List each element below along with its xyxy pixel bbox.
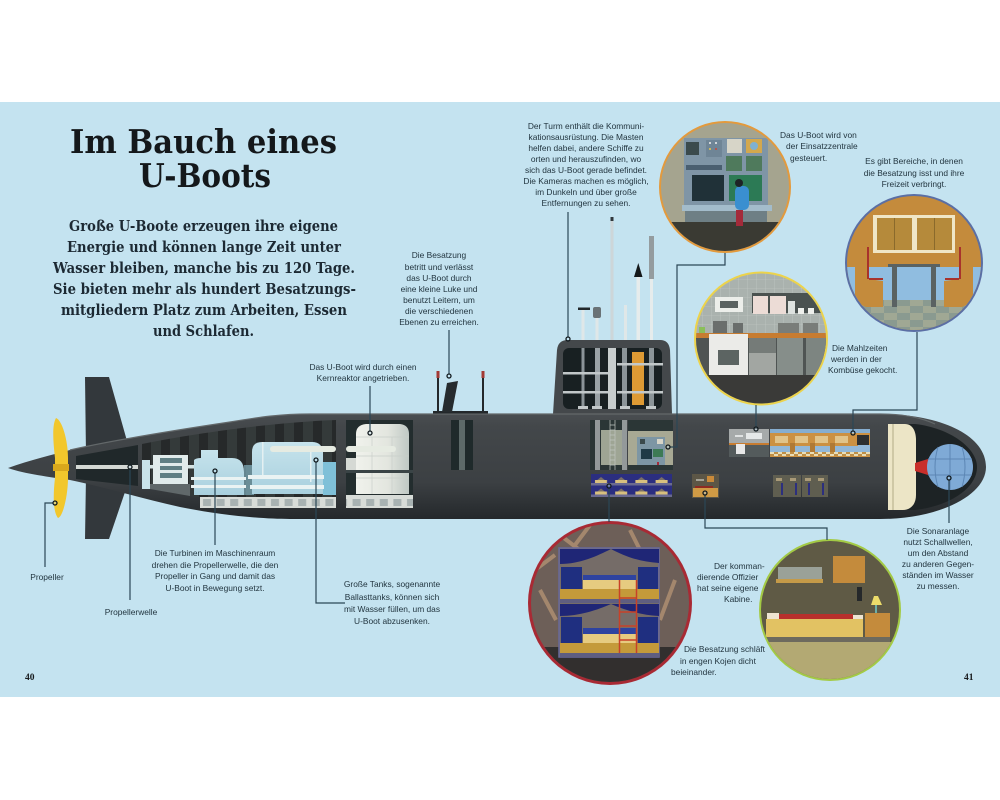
callout: hatch: eine kleine Luke und xyxy=(401,284,478,294)
ladder room xyxy=(590,420,627,470)
circle: bunks xyxy=(528,521,692,687)
hull top highlight xyxy=(70,414,935,450)
callout: ballast tanks: Große Tanks, sogenannte xyxy=(344,579,440,589)
callout: mess xyxy=(851,156,965,435)
callout: tower: sich das U-Boot gerade befindet. xyxy=(525,165,647,175)
callout: turbines: drehen die Propellerwelle, die den xyxy=(152,560,279,570)
callout: control room xyxy=(666,130,858,449)
page number right: 41 xyxy=(964,673,974,683)
callout: bunks: beieinander. xyxy=(671,667,717,677)
reactor room xyxy=(346,420,413,508)
hatch and snorkels xyxy=(433,371,488,414)
conning tower interior xyxy=(563,348,663,409)
intro text block: mitgliedern Platz zum Arbeiten, Essen xyxy=(61,302,347,319)
callout: propeller xyxy=(30,501,64,582)
page background panel xyxy=(0,102,1000,697)
callout: sonar: um den Abstand xyxy=(908,548,969,558)
title xyxy=(70,122,337,195)
hull xyxy=(8,414,986,519)
galley miniature xyxy=(729,429,769,457)
ladder shaft xyxy=(451,420,473,470)
submarine xyxy=(8,217,986,539)
callout: propeller: Propeller xyxy=(30,572,64,582)
callout: sonar: zu messen. xyxy=(917,581,959,591)
masts xyxy=(578,217,654,341)
bow sonar compartment xyxy=(888,424,977,510)
callout: tower xyxy=(523,121,649,341)
callout: bunks xyxy=(607,484,766,677)
callout: tower: helfen dabei, andere Schiffe zu xyxy=(528,143,644,153)
callout: officer cabin xyxy=(697,491,827,604)
circle: control room xyxy=(659,121,791,257)
callout: control room: Das U-Boot wird von xyxy=(780,130,857,140)
callout: ballast tanks: U-Boot abzusenken. xyxy=(354,616,430,626)
tail fins xyxy=(85,377,127,539)
propeller xyxy=(53,418,69,518)
callout: sonar: Die Sonaranlage xyxy=(907,526,970,536)
callout: officer cabin: hat seine eigene xyxy=(697,583,759,593)
callout: hatch: benutzt Leitern, um xyxy=(403,295,475,305)
callout: hatch: betritt und verlässt xyxy=(405,262,474,272)
callout: propeller shaft: Propellerwelle xyxy=(105,607,158,617)
callout: officer cabin: dierende Offizier xyxy=(697,572,759,582)
callout: ballast tanks: mit Wasser füllen, um das xyxy=(344,604,440,614)
conning tower xyxy=(553,340,672,414)
callout: sonar: zu anderen Gegen- xyxy=(902,559,974,569)
callout: officer cabin: Kabine. xyxy=(724,594,752,604)
callout: galley xyxy=(754,343,897,431)
callout: hatch: Ebenen zu erreichen. xyxy=(399,317,479,327)
callout: ballast tanks: Ballasttanks, können sich xyxy=(345,592,440,602)
callout: bunks: Die Besatzung schläft xyxy=(684,644,766,654)
callout: control room: der Einsatzzentrale xyxy=(786,141,858,151)
callout: turbines: Propeller in Gang und damit das xyxy=(155,571,275,581)
officer cabin miniature xyxy=(692,474,719,498)
callout: sonar xyxy=(902,476,974,591)
callout: propeller shaft xyxy=(105,465,158,617)
callout: tower: orten und herauszufinden, wo xyxy=(531,154,642,164)
callout: tower: Die Kameras machen es möglich, xyxy=(523,176,649,186)
title: Im Bauch eines xyxy=(70,122,337,161)
aft shaft compartment xyxy=(76,445,138,486)
intro text block xyxy=(52,218,356,340)
callout: galley: Kombüse gekocht. xyxy=(828,365,897,375)
callout: sonar: ständen im Wasser xyxy=(902,570,974,580)
callout: mess: die Besatzung isst und ihre xyxy=(864,168,965,178)
callout: galley: Die Mahlzeiten xyxy=(832,343,888,353)
circle: mess xyxy=(845,194,983,336)
bunks miniature xyxy=(591,474,672,497)
callout: tower: im Dunkeln und über große xyxy=(535,187,637,197)
callout: reactor: Kernreaktor angetrieben. xyxy=(317,373,409,383)
callout: galley: werden in der xyxy=(830,354,882,364)
intro text block: Wasser bleiben, manche bis zu 120 Tage. xyxy=(52,260,355,277)
callout: mess: Freizeit verbringt. xyxy=(882,179,946,189)
callout: bunks: in engen Kojen dicht xyxy=(680,656,757,666)
callout: reactor xyxy=(309,362,417,435)
crew cabins miniature xyxy=(773,475,828,497)
callout: tower: kationsausrüstung. Die Masten xyxy=(528,132,644,142)
callout: mess: Es gibt Bereiche, in denen xyxy=(865,156,963,166)
callout: control room: gesteuert. xyxy=(790,153,827,163)
callout: hatch: Die Besatzung xyxy=(412,250,467,260)
callout: hatch xyxy=(399,250,479,378)
intro text block: Sie bieten mehr als hundert Besatzungs- xyxy=(53,281,356,298)
control room miniature xyxy=(628,420,673,470)
callout: officer cabin: Der komman- xyxy=(714,561,765,571)
callout: sonar: nutzt Schallwellen, xyxy=(903,537,973,547)
callout: tower: Der Turm enthält die Kommuni- xyxy=(528,121,644,131)
circle: galley xyxy=(694,272,828,406)
mess miniature xyxy=(770,429,870,457)
callout: hatch: das U-Boot durch xyxy=(406,273,472,283)
title: U-Boots xyxy=(139,156,271,195)
callout: ballast tanks xyxy=(314,458,440,626)
intro text block: Energie und können lange Zeit unter xyxy=(67,239,341,256)
callout: hatch: die verschiedenen xyxy=(405,306,473,316)
callout: turbines xyxy=(152,469,279,593)
intro text block: Große U-Boote erzeugen ihre eigene xyxy=(69,218,338,235)
callout: reactor: Das U-Boot wird durch einen xyxy=(309,362,417,372)
callout: turbines: U-Boot in Bewegung setzt. xyxy=(165,583,265,593)
callout: turbines: Die Turbinen im Maschinenraum xyxy=(155,548,275,558)
page number left: 40 xyxy=(25,673,35,683)
intro text block: und Schlafen. xyxy=(153,323,254,340)
callout: tower: Entfernungen zu sehen. xyxy=(542,198,630,208)
circle: officer cabin xyxy=(759,539,901,682)
engine room xyxy=(142,420,336,508)
